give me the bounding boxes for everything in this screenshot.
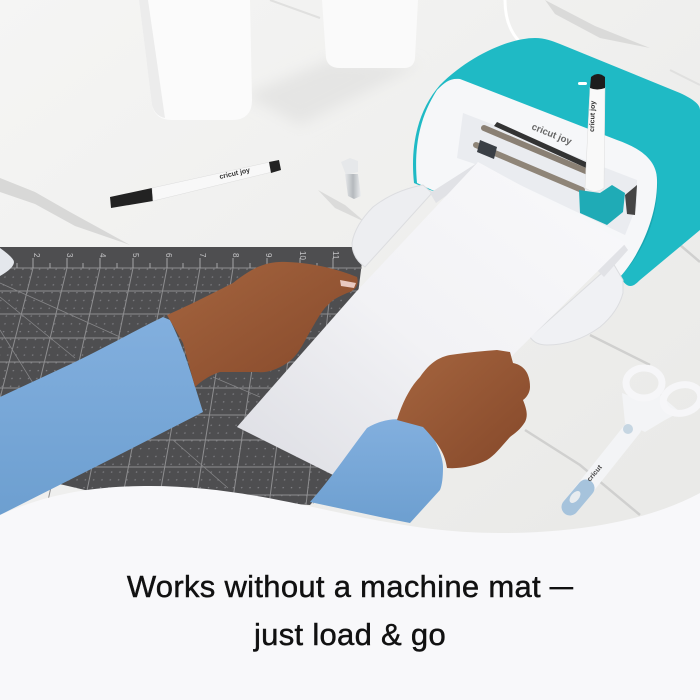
white wave panel xyxy=(0,486,700,700)
cutting mat: 9 xyxy=(264,253,273,258)
pen on desk: cricut joy xyxy=(219,167,251,181)
teal pen carriage and pen xyxy=(579,74,625,225)
pen on desk xyxy=(110,160,281,208)
right hand xyxy=(397,350,530,468)
small blade housing xyxy=(341,158,361,199)
caption: just load & go xyxy=(254,617,446,652)
scissors xyxy=(567,368,700,507)
cutting mat: 2 xyxy=(32,253,41,258)
white containers xyxy=(139,0,520,120)
marble desk background xyxy=(0,0,700,540)
white paper sheet xyxy=(237,162,626,477)
cutting mat: 11 xyxy=(331,251,340,260)
scissors: cricut xyxy=(586,464,604,483)
caption: Works without a machine mat — xyxy=(127,569,573,604)
machine body: cricut joy xyxy=(530,122,574,148)
cutting mat: 7 xyxy=(198,253,207,258)
cutting mat xyxy=(0,247,365,505)
cutting mat: 10 xyxy=(298,251,307,260)
cutting mat: 4 xyxy=(98,253,107,258)
right sleeve xyxy=(310,419,443,523)
paper trays xyxy=(352,163,628,345)
left sleeve xyxy=(0,317,203,515)
caption xyxy=(126,569,574,652)
paper slot xyxy=(457,113,637,235)
cutting mat: 6 xyxy=(164,253,173,258)
machine body xyxy=(413,38,700,286)
cutting mat: 8 xyxy=(231,253,240,258)
left hand xyxy=(167,262,358,387)
teal pen carriage and pen: cricut joy xyxy=(589,101,597,132)
cutting mat: 5 xyxy=(131,253,140,258)
cutting mat: 3 xyxy=(65,253,74,258)
fingernail xyxy=(340,280,356,288)
